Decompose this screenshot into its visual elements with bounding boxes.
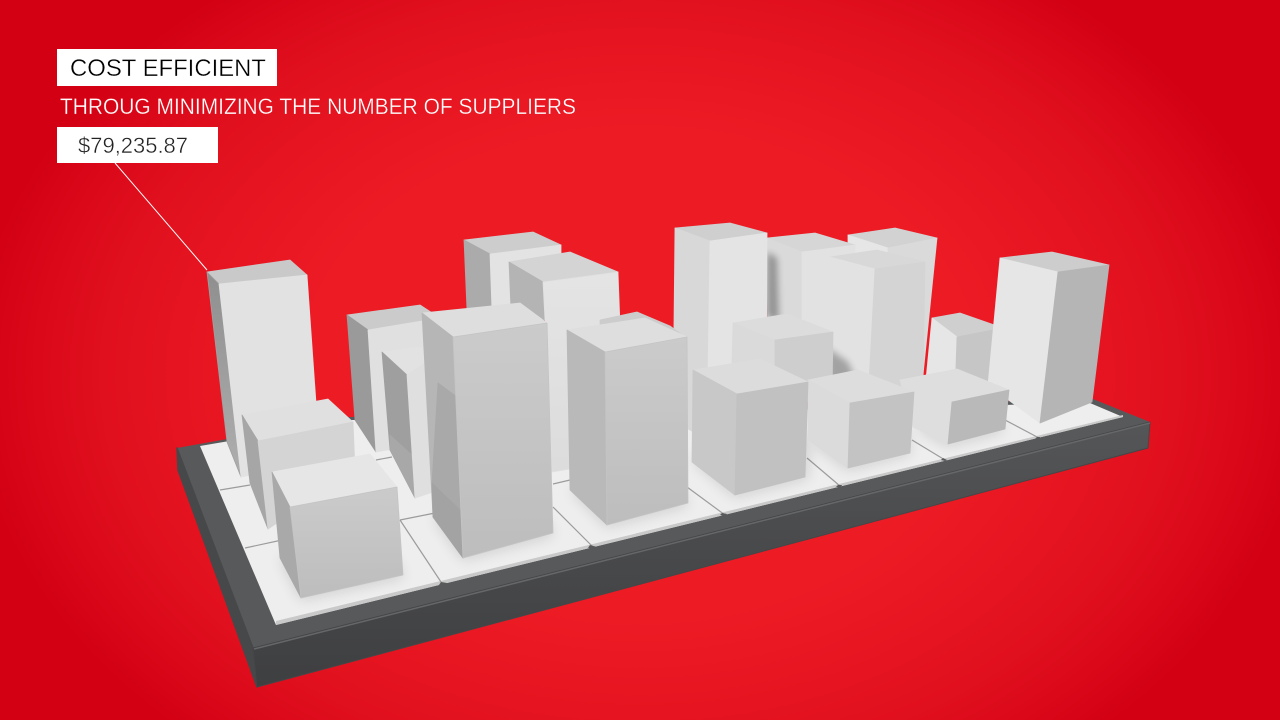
bar: back centre tall — [673, 223, 767, 440]
value box: $79,235.87 — [78, 133, 188, 158]
subtitle: THROUG MINIMIZING THE NUMBER OF SUPPLIERS — [60, 94, 576, 119]
bar: far right tall — [988, 252, 1109, 423]
bar: left third row — [382, 347, 445, 498]
cube: front left back — [242, 399, 355, 529]
bar: centre back tall — [509, 252, 625, 472]
cube: front row middle right — [808, 370, 914, 468]
cube: front low right — [900, 369, 1009, 444]
board with grid cells — [200, 403, 1123, 625]
bar: hidden top behind front centre — [600, 312, 682, 350]
leader line — [115, 163, 207, 270]
title box — [57, 49, 277, 86]
bar: back centre right — [767, 233, 855, 400]
contact shadows — [280, 400, 1005, 600]
bar: largest front centre — [422, 303, 553, 558]
bar: back right small cube — [925, 313, 1003, 395]
bar: middle left — [347, 305, 445, 452]
bar: far left tall with leader target — [207, 260, 320, 477]
cube: middle row right — [731, 314, 833, 410]
bar: back centre left — [464, 232, 561, 310]
cube: front left — [272, 454, 403, 598]
shadow on centre right bar — [828, 348, 858, 385]
bar: centre right tall — [828, 250, 925, 402]
shadow on back centre right bar — [767, 252, 779, 322]
value box — [57, 127, 218, 163]
bar: front centre right — [567, 318, 688, 525]
cube: front row middle — [692, 359, 808, 495]
title box: COST EFFICIENT — [70, 55, 266, 82]
bar: back right tall — [848, 228, 937, 390]
base plate — [177, 399, 1150, 687]
